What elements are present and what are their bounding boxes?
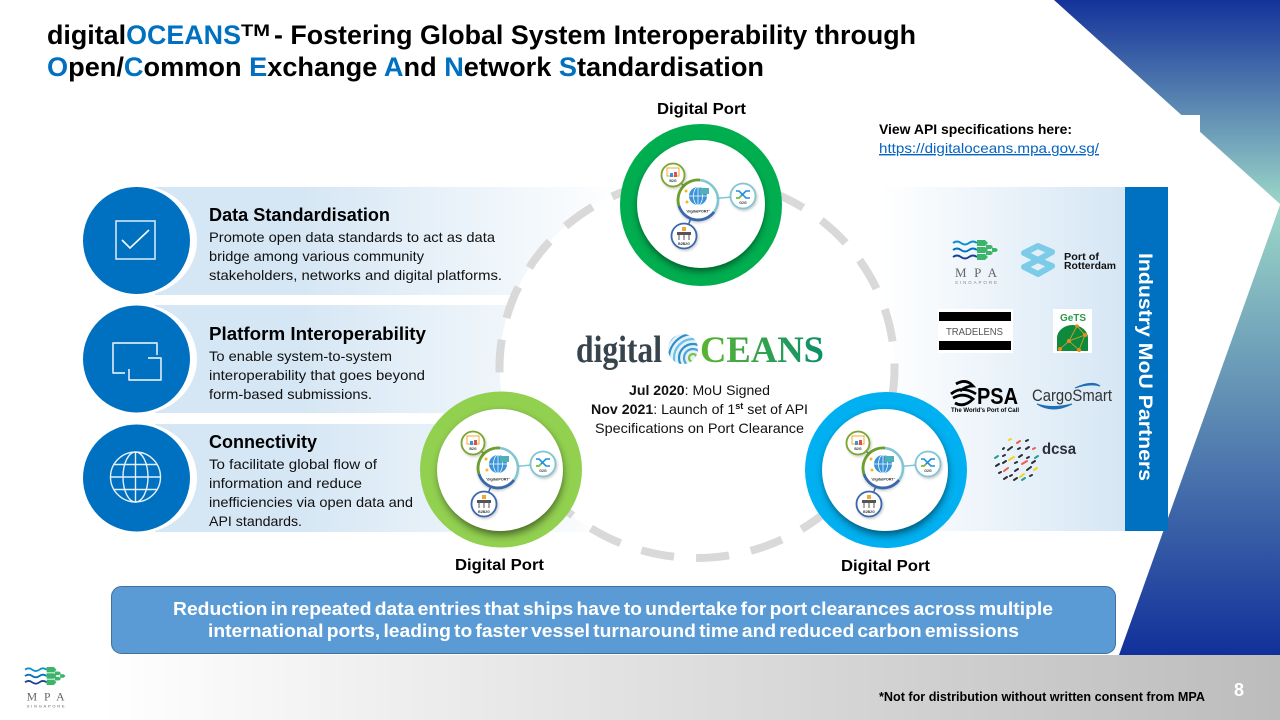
logo: MPA: MPA <box>955 265 998 280</box>
description: interoperability that goes beyond <box>209 367 425 383</box>
logo: TradeLens: TRADELENS <box>946 326 1003 338</box>
logo: dcsa <box>995 439 1076 480</box>
milestones text: Nov 2021: Launch of 1 <box>591 401 734 417</box>
logo: PSA: PSA <box>977 383 1018 409</box>
top right gradient triangle <box>1054 0 1280 204</box>
port label: Digital Port <box>841 558 931 575</box>
milestones text: Specifications on Port Clearance <box>595 420 804 436</box>
API specifications link <box>879 121 1099 156</box>
logo: GeTS <box>1053 309 1092 353</box>
port node diagram: B2G <box>469 447 477 451</box>
panel: connectivity <box>81 423 413 533</box>
heading: Connectivity <box>209 432 317 452</box>
port node diagram: 'digitalPORT' <box>686 210 710 214</box>
port node diagram: 'digitalPORT' <box>486 478 510 482</box>
logo: digitalOCEANS: CEANS <box>700 330 824 371</box>
title: Open/Common Exchange And Network Standardisation <box>47 52 764 82</box>
logo: MPA: SINGAPORE <box>955 280 997 285</box>
distribution disclaimer: *Not for distribution without written consent from MPA <box>879 689 1206 704</box>
logo: Port of Rotterdam: Port of <box>1064 252 1100 263</box>
dashed ring connecting ports <box>500 178 894 558</box>
port label: Digital Port <box>657 101 747 118</box>
digital port: top <box>620 101 782 286</box>
port ring <box>620 124 782 286</box>
description <box>209 229 502 283</box>
description <box>209 348 425 402</box>
description: API standards. <box>209 513 302 529</box>
footer MPA logo <box>25 667 66 708</box>
logo: digitalOCEANS: digital <box>576 329 662 371</box>
footer MPA logo: SINGAPORE <box>27 703 65 708</box>
digital port: right <box>805 392 967 575</box>
description: information and reduce <box>209 475 362 491</box>
description: inefficiencies via open data and <box>209 494 413 510</box>
logo: GeTS: GeTS <box>1060 313 1086 324</box>
footer MPA logo: MPA <box>27 690 65 703</box>
port node diagram: G2G <box>739 201 747 205</box>
port node diagram: B2G <box>669 179 677 183</box>
port node diagram: B2G <box>854 447 862 451</box>
API specifications link: https://digitaloceans.mpa.gov.sg/ <box>879 140 1099 156</box>
title: digitalOCEANS <box>47 20 241 50</box>
description: bridge among various community <box>209 248 424 264</box>
description: Promote open data standards to act as data <box>209 229 495 245</box>
title: TM <box>241 21 270 40</box>
description: To enable system-to-system <box>209 348 392 364</box>
milestones text: Jul 2020: MoU Signed <box>629 382 770 398</box>
port node diagram: B2B2G <box>863 510 875 514</box>
description <box>209 456 413 529</box>
logo: Port of Rotterdam: Rotterdam <box>1064 261 1116 272</box>
port ring <box>805 392 967 548</box>
digital port: left <box>420 392 582 574</box>
panel: platform interoperability <box>81 304 426 414</box>
outcome callout: Reduction in repeated data entries that ships have to undertake for port clearances across multiple <box>173 599 1053 619</box>
description: To facilitate global flow of <box>209 456 377 472</box>
white notch over triangle <box>1181 115 1200 135</box>
port ring <box>420 392 582 548</box>
title: - Fostering Global System Interoperability through <box>274 20 916 50</box>
port node diagram: G2G <box>539 469 547 473</box>
port node diagram: 'digitalPORT' <box>871 478 895 482</box>
API specifications link: View API specifications here: <box>879 121 1072 137</box>
partner title bar <box>1125 187 1168 531</box>
heading: Platform Interoperability <box>209 324 426 344</box>
outcome callout: international ports, leading to faster vessel turnaround time and reduced carbon emissions <box>208 621 1019 641</box>
logo: MPA <box>953 240 998 285</box>
left band backgrounds <box>155 187 625 532</box>
logo: CargoSmart: CargoSmart <box>1032 386 1112 405</box>
logo: PSA <box>951 381 1019 414</box>
logo: PSA: The World's Port of Call <box>951 407 1019 414</box>
icon: globe <box>81 423 197 533</box>
port node diagram <box>846 432 942 519</box>
port label: Digital Port <box>455 557 545 574</box>
partner logos <box>938 240 1116 480</box>
panel: data standardisation <box>81 186 502 296</box>
bottom right gradient triangle <box>1119 205 1280 655</box>
title <box>47 20 916 82</box>
logo: digitalOCEANS <box>577 334 822 370</box>
milestones text: set of API <box>743 401 808 417</box>
right partner band background <box>880 187 1125 531</box>
partner title bar: Industry MoU Partners <box>1134 253 1155 481</box>
description: form-based submissions. <box>209 386 372 402</box>
description: stakeholders, networks and digital platforms. <box>209 267 502 283</box>
port node diagram <box>662 164 758 251</box>
logo: Port of Rotterdam <box>1024 246 1116 274</box>
icon: checkbox <box>81 186 197 296</box>
outcome callout <box>112 586 1116 654</box>
port node diagram: B2B2G <box>478 510 490 514</box>
heading: Data Standardisation <box>209 205 390 225</box>
port node diagram: B2B2G <box>678 242 690 246</box>
icon: overlapping screens <box>81 304 197 414</box>
milestones text <box>591 382 808 436</box>
port node diagram: G2G <box>924 469 932 473</box>
milestones text: st <box>735 401 743 411</box>
logo: dcsa: dcsa <box>1042 441 1076 458</box>
white disc inside dashed ring <box>500 178 894 558</box>
logo: TradeLens <box>938 309 1013 353</box>
logo: CargoSmart <box>1032 383 1112 409</box>
port node diagram <box>462 432 558 519</box>
page number: 8 <box>1234 680 1244 700</box>
footer band <box>0 655 1280 720</box>
